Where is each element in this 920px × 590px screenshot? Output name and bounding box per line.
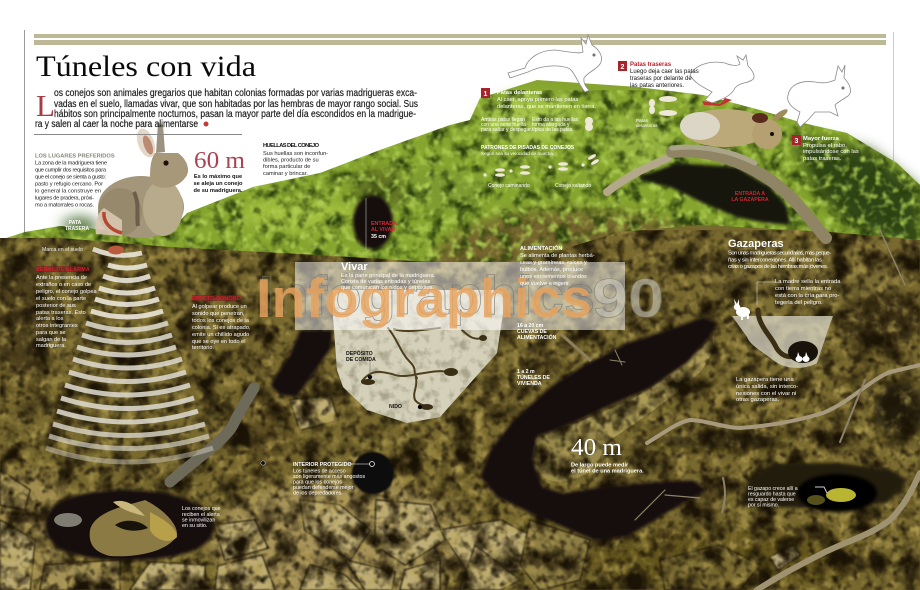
stat: 40 m xyxy=(571,435,644,474)
step 1: front legs: típica de las patas. xyxy=(532,127,574,133)
text: feeding: que vuelve a ingerir. xyxy=(520,281,571,287)
step 1: front legs: Patas delanteras xyxy=(497,90,542,96)
text: feeding: bulbos. Además, produce xyxy=(520,267,583,273)
label: footprint patterns: PATRONES DE PISADAS DE CONEJOS xyxy=(481,145,575,151)
text: preferred places: lugares de pradera, próxi- xyxy=(35,196,94,202)
tonal patches of grass xyxy=(62,96,920,290)
step 2: hind legs: 2 xyxy=(620,64,624,71)
step 1: front legs: 1 xyxy=(484,91,488,98)
text: alarm signal: alerta a los xyxy=(36,316,64,322)
stat: 40 m: el túnel de una madriguera. xyxy=(571,468,644,474)
text: rabbits freeze: en su sitio. xyxy=(182,523,207,529)
grass texture xyxy=(10,90,920,262)
text: sound effect: territorio. xyxy=(192,345,215,351)
watermark band: Infographics xyxy=(256,267,592,329)
step 1: front legs: forma alargada y xyxy=(532,122,570,128)
labels: feeding caves and tunnels: TÚNELES DE xyxy=(517,374,550,381)
text: feeding: ceas y gramíneas, raíces y xyxy=(520,260,587,266)
text: vivar heading xyxy=(341,261,436,291)
text: alarm signal: posterior de sus xyxy=(36,303,76,309)
intro text: vadas en el suelo, llamadas vivar, que son habitadas por las hembras de mayor rango social. Sus xyxy=(54,99,418,110)
label: gazapera entrance xyxy=(731,191,769,203)
labels: vivar map: DE COMIDA xyxy=(346,357,376,363)
text: footprints: dibles, producto de su xyxy=(263,158,319,164)
text: gazaperas: Son unas madrigueras secundarias, más peque- xyxy=(728,250,831,256)
step 3: thrust: impulsándose con las xyxy=(803,149,859,155)
illustration: crouching rabbit on the hill xyxy=(680,107,789,149)
text: protected interior: INTERIOR PROTEGIDO xyxy=(293,462,352,468)
text: gazaperas xyxy=(728,238,841,403)
labels: vivar map: NIDO xyxy=(389,404,402,410)
label: vivar entrance: AL VIVAR xyxy=(371,227,395,233)
text: vivar heading: Es la parte principal de la madriguera. xyxy=(341,273,436,279)
text: young rabbit: es capaz de valerse xyxy=(748,497,794,503)
text: protected interior: de los depredadores. xyxy=(293,490,343,496)
text: gazaperas: con tierra mientras no xyxy=(775,286,831,292)
text: sound effect: sonido que penetran, xyxy=(192,311,245,317)
text: protected interior xyxy=(293,462,365,496)
text: gazaperas: ñas y sin interconexiones. Allí habitan las xyxy=(728,258,822,264)
text: preferred places: lo general la construye en xyxy=(35,188,101,194)
cave: gazapera entrance xyxy=(637,163,790,225)
text: alarm signal xyxy=(36,266,98,349)
step 1: front legs: Esto da a las huellas xyxy=(532,117,579,123)
text: sound effect xyxy=(192,295,251,351)
red impact mark xyxy=(108,246,124,254)
labels: feeding caves and tunnels: CUEVAS DE xyxy=(517,329,547,335)
text: protected interior: para que los conejos xyxy=(293,480,342,486)
step 2: hind legs: traseras por delante de xyxy=(630,76,692,82)
illustration: leaping rabbit 1 xyxy=(508,35,602,92)
log arch over the entrance xyxy=(607,147,826,238)
intro text: ra y salen al caer la noche para alimentarse xyxy=(35,119,198,130)
text: young rabbit: El gazapo crece allí a xyxy=(748,486,798,492)
text: feeding xyxy=(520,244,595,287)
intro rule xyxy=(34,134,242,135)
text: young rabbit xyxy=(748,486,798,508)
text: vivar heading: Consta de varias entradas y túneles xyxy=(341,279,430,285)
label: footprint patterns xyxy=(481,118,658,189)
label: footprint patterns: Conejo caminando xyxy=(488,183,530,189)
label: footprint patterns: delanteras xyxy=(636,123,658,128)
step 1: front legs: con una serie huella xyxy=(481,122,526,128)
text: alarm signal: el suelo con la parte xyxy=(36,296,86,302)
text: vivar heading: Vivar xyxy=(341,261,368,273)
stat: 60 m: de su madriguera. xyxy=(194,188,243,194)
text: alarm signal: peligro, el conejo golpea xyxy=(36,289,98,295)
label: mark on ground: Marca en el suelo xyxy=(42,247,83,253)
step 3: thrust: Mayor fuerza xyxy=(803,136,840,142)
header rules xyxy=(24,30,894,235)
baby rabbit chamber xyxy=(797,474,877,512)
text: protected interior: son ligeramente más angostos xyxy=(293,474,365,480)
rocks xyxy=(0,395,800,590)
step 1: front legs: Ambas patas llegan xyxy=(481,117,525,123)
text: alarm signal: SEÑAL DE ALARMA xyxy=(36,266,90,273)
step 2: hind legs: Patas traseras xyxy=(630,62,672,68)
roots xyxy=(170,230,920,590)
text: alarm signal: madriguera. xyxy=(36,343,66,349)
panel: grassy hill xyxy=(6,80,920,262)
text: sound effect: EFECTO SONORO xyxy=(192,296,242,302)
stat: 60 m: se aleja un conejo xyxy=(194,181,243,187)
text: preferred places: que el conejo se sienta a gusto: xyxy=(35,174,106,180)
step 2: hind legs: Luego deja caer las patas xyxy=(630,69,699,75)
step 3: thrust: patas traseras. xyxy=(803,156,842,162)
illustration: leaping rabbit 3 xyxy=(788,65,851,127)
text: preferred places: que cumplir dos requisitos para xyxy=(35,168,107,174)
text: preferred places: La zona de la madriguera tiene xyxy=(35,160,107,166)
text: footprints: caminar y brincar. xyxy=(263,171,308,177)
step 1: front legs: delanteras, que se mantienen en tierra. xyxy=(497,104,596,110)
label: hind leg xyxy=(65,220,89,232)
watermark band: Infographics xyxy=(259,264,595,326)
soil tonal patches xyxy=(0,250,920,590)
baby rabbits xyxy=(796,352,810,362)
sound wave arcs xyxy=(46,249,213,462)
white rabbit silhouette xyxy=(734,299,750,320)
watermark band: 90 xyxy=(592,267,664,329)
labels: feeding caves and tunnels: ALIMENTACIÓN xyxy=(517,333,557,341)
label: gazapera entrance: LA GAZAPERA xyxy=(731,197,769,203)
panel: gazapera diagram xyxy=(732,282,833,368)
text: gazaperas: La madre sella la entrada xyxy=(775,279,841,285)
text: vivar heading: que comunican los nidos y depósitos. xyxy=(341,285,434,291)
labels: vivar map xyxy=(346,349,402,410)
text: sound effect: emite un chillido agudo xyxy=(192,332,249,338)
step 3: thrust xyxy=(792,135,859,162)
left rabbit in chamber xyxy=(54,500,177,556)
intro text: os conejos son animales gregarios que habitan colonias formadas por varias madrigueras exca- xyxy=(54,88,417,99)
text: sound effect: Al golpear produce un xyxy=(192,304,247,310)
text: gazaperas: nexiones con el vivar ni xyxy=(736,391,796,397)
labels: feeding caves and tunnels xyxy=(517,323,557,387)
label: gazapera entrance: ENTRADA A xyxy=(735,191,765,197)
ridge by the tunnel xyxy=(537,335,714,467)
step 2: hind legs: las patas anteriores. xyxy=(630,83,684,89)
soil texture xyxy=(0,230,920,590)
illustration: leaping rabbit 2 xyxy=(690,55,754,106)
text: sound effect: todos los conejos de la xyxy=(192,318,250,324)
text: preferred places: mo a matorrales o rocas. xyxy=(35,202,94,208)
text: footprints: forma particular de xyxy=(263,164,310,170)
text: young rabbit: resguardo hasta que xyxy=(748,492,796,498)
text: feeding: ALIMENTACIÓN xyxy=(520,244,562,252)
text: gazaperas: crías o gazapos de las hembras más jóvenes. xyxy=(728,264,828,270)
text: alarm signal: salgan de la xyxy=(36,337,67,343)
text: preferred places: pasto y refugio cercano. Por xyxy=(35,182,103,188)
labels: vivar map: DEPÓSITO xyxy=(346,349,373,357)
stat: 60 m: 60 m xyxy=(194,148,245,174)
label: footprint patterns: Según sea su velocidad de marcha xyxy=(481,151,553,156)
entrance: vivar hole xyxy=(353,195,393,249)
text: gazaperas: Gazaperas xyxy=(728,238,784,250)
tunnels xyxy=(45,317,907,560)
intro text xyxy=(35,88,418,130)
text: alarm signal: patas traseras. Esto xyxy=(36,310,86,316)
title: Túneles con vida xyxy=(36,50,256,83)
text: alarm signal: para que se xyxy=(36,330,66,336)
text: gazaperas: La gazapera tiene una xyxy=(736,377,794,383)
step 3: thrust: Propulsa el rabo, xyxy=(803,143,847,149)
step 3: thrust: 3 xyxy=(794,138,798,145)
text: gazaperas: tegerla del peligro. xyxy=(775,300,823,306)
panel: vivar map xyxy=(333,290,503,423)
step 2: hind legs xyxy=(618,61,699,89)
labels: feeding caves and tunnels: 16 a 20 cm xyxy=(517,323,544,329)
panel: underground soil xyxy=(0,225,920,590)
stat: 60 m: Es lo máximo que xyxy=(194,174,242,180)
illustration: sitting rabbit xyxy=(95,123,188,238)
text: feeding: unos excrementos blandos xyxy=(520,274,587,280)
text: rabbits freeze: Los conejos que xyxy=(182,506,221,512)
step 1: front legs: para saltar y despegar. xyxy=(481,127,532,133)
label: vivar entrance: 35 cm xyxy=(371,234,386,240)
text: rabbits freeze: se inmovilizan xyxy=(182,518,215,524)
text: protected interior: Los túneles de acceso xyxy=(293,468,346,474)
label: vivar entrance xyxy=(366,198,397,250)
text: footprints: HUELLAS DEL CONEJO xyxy=(263,143,320,149)
text: alarm signal: extraños o en caso de xyxy=(36,282,91,288)
stat: 40 m: De largo puede medir xyxy=(571,462,629,468)
text: preferred places: LOS LUGARES PREFERIDOS xyxy=(35,154,115,160)
burrow network xyxy=(362,328,483,406)
text: young rabbit: por sí mismo. xyxy=(748,502,779,508)
step 1: front legs xyxy=(481,88,596,133)
text: footprints: Sus huellas son inconfun- xyxy=(263,151,328,157)
label: hind leg: PATA xyxy=(69,220,82,226)
text: sound effect: colonia. Si es atrapado, xyxy=(192,325,251,331)
label: footprint patterns: Patas xyxy=(636,118,648,123)
stat: 40 m: 40 m xyxy=(571,435,622,461)
labels: feeding caves and tunnels: VIVIENDA xyxy=(517,381,542,387)
hole: protected interior xyxy=(261,452,394,494)
text: gazaperas: única salida, sin interco- xyxy=(736,384,798,390)
footprints xyxy=(483,96,677,177)
text: gazaperas: está con la cría para pro- xyxy=(775,293,840,299)
text: preferred places xyxy=(35,154,115,208)
labels: feeding caves and tunnels: 1 a 2 m xyxy=(517,369,535,375)
text: alarm signal: Ante la presencia de xyxy=(36,275,87,281)
intro text: hábitos son principalmente nocturnos, pasan la mayor parte del día escondidos en la madrigue- xyxy=(54,109,416,120)
text: protected interior: puedan defenderse mejor xyxy=(293,485,354,491)
text: footprints xyxy=(263,143,328,177)
text: gazaperas: otras gazaperas. xyxy=(736,397,780,403)
intro drop cap: L xyxy=(36,88,55,123)
step 1: front legs: Al caer, apoya primero las patas xyxy=(497,97,578,103)
text: sound effect: que se oye en todo el xyxy=(192,339,246,345)
text: alarm signal: otros integrantes xyxy=(36,323,78,329)
text: feeding: Se alimenta de plantas herbá- xyxy=(520,253,595,259)
label: vivar entrance: ENTRADA xyxy=(371,221,397,227)
text: rabbits freeze xyxy=(182,506,221,529)
label: hind leg: TRASERA xyxy=(65,226,89,232)
text: rabbits freeze: reciben el alerta xyxy=(182,512,220,518)
stat: 60 m xyxy=(194,148,245,194)
label: footprint patterns: Conejo saltando xyxy=(555,183,591,189)
